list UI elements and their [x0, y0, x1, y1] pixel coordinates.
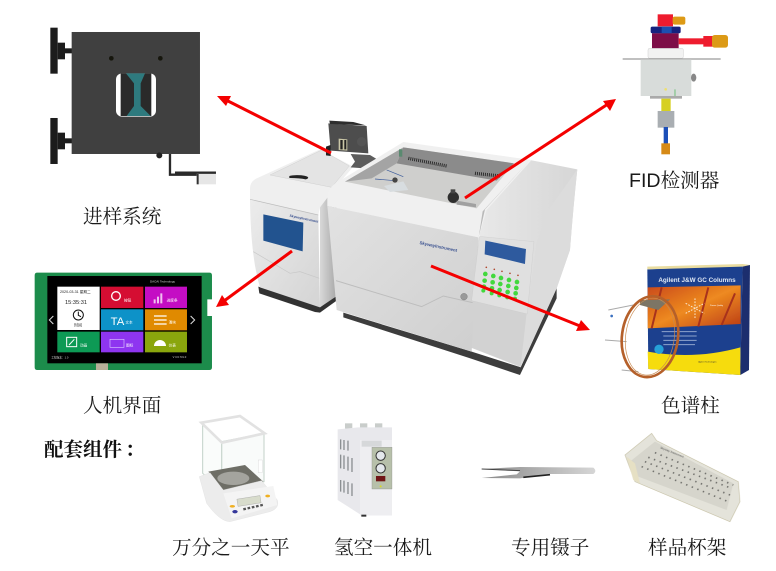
- button tile: [101, 287, 143, 308]
- main instrument: [250, 121, 577, 375]
- animation tile: [57, 332, 100, 352]
- arrow: to FID detector: [465, 99, 616, 198]
- panel: sample injection system: [50, 28, 216, 184]
- balance glass draft shield: [201, 416, 265, 490]
- capillary column coil: [605, 292, 683, 381]
- icon tile: 图标: [126, 342, 134, 347]
- oven opening: [345, 147, 514, 208]
- column box: Agilent Technologies: [698, 361, 716, 364]
- panel: analytical balance: [199, 416, 278, 522]
- clock tile: 时间: [74, 321, 82, 327]
- progress tile: 进度条: [167, 298, 178, 303]
- generator gauges panel: [372, 447, 392, 489]
- FID top fittings: [648, 14, 728, 58]
- arrow: to touch screen: [216, 251, 292, 307]
- clock tile: [57, 287, 100, 330]
- circuit board: [35, 273, 212, 370]
- FID lower tube: [658, 99, 674, 154]
- rack frame: [625, 433, 740, 522]
- label: touch screen: 人机界面: [83, 395, 161, 417]
- arrow: to injection system: [217, 96, 331, 153]
- column box: [647, 264, 750, 375]
- icon tile: [101, 332, 143, 352]
- sampler body: [72, 32, 200, 154]
- panel: touch screen: [35, 273, 212, 370]
- progress tile: [145, 287, 187, 308]
- label: tweezers: 专用镊子: [511, 537, 589, 559]
- panel: hydrogen air generator: [338, 423, 392, 517]
- generator body: [338, 427, 392, 515]
- generator top ports: [345, 423, 382, 429]
- gauge tile: [145, 332, 187, 352]
- sampler window: [116, 73, 156, 117]
- label: sample injection system: 进样系统: [83, 206, 162, 228]
- column box: Proven Quality: [710, 304, 723, 307]
- icon: tweezers: [482, 467, 595, 478]
- label: analytical balance: 万分之一天平: [172, 537, 290, 559]
- left unit: sample module: [250, 149, 353, 313]
- panel: sample cup rack: [625, 433, 740, 522]
- icon: knobs: [50, 28, 72, 164]
- panel: touch screen: DACAI Technology: [150, 280, 175, 284]
- text tile: 文本: [125, 319, 133, 324]
- balance base: [199, 465, 278, 522]
- control panel: [472, 237, 534, 314]
- label: sample cup rack: 样品杯架: [648, 537, 727, 559]
- animation tile: 动画: [80, 342, 88, 347]
- button tile: 按钮: [124, 298, 132, 303]
- rack holes: [642, 453, 733, 502]
- black screen: [47, 276, 202, 363]
- navigation arrows: [49, 316, 195, 324]
- column box: Agilent J&W GC Columns: [658, 277, 736, 284]
- gauge tile: 仪表: [169, 342, 176, 347]
- FID detector on oven top: [448, 189, 476, 207]
- left unit touchscreen: [263, 214, 303, 251]
- panel: FID detector: [623, 14, 728, 154]
- oven door: [327, 206, 479, 352]
- text tile: TA: [111, 316, 125, 328]
- left unit: sample module: SkywayInstrument: [289, 214, 320, 224]
- slider tile: 滑块: [169, 319, 176, 324]
- generator vents: [341, 439, 352, 496]
- label: FID detector: FID检测器: [629, 170, 720, 192]
- text tile: [101, 309, 143, 330]
- panel: chromatographic column: [605, 264, 750, 381]
- arrow: to chromatographic column: [431, 266, 590, 331]
- panel: sample cup rack: Skyway Instrument: [660, 446, 685, 459]
- right unit: oven and body: SkywayInstrument: [419, 240, 458, 253]
- right unit: oven and body: [327, 142, 577, 375]
- autosampler on top: [326, 121, 378, 168]
- label: chromatographic column: 色谱柱: [661, 395, 720, 417]
- clock tile: 2020-03-31 星期二: [60, 289, 91, 294]
- slider tile: [145, 309, 187, 330]
- clock tile: 15:35:31: [65, 300, 87, 306]
- FID body: [623, 59, 721, 99]
- label: hydrogen air generator: 氢空一体机: [334, 537, 432, 559]
- panel: touch screen: V 3.6.731.0: [173, 355, 187, 359]
- bracket: [156, 152, 216, 184]
- heading: accessories: 配套组件：: [44, 439, 145, 461]
- panel: touch screen: 工程版本：1.0: [51, 356, 69, 360]
